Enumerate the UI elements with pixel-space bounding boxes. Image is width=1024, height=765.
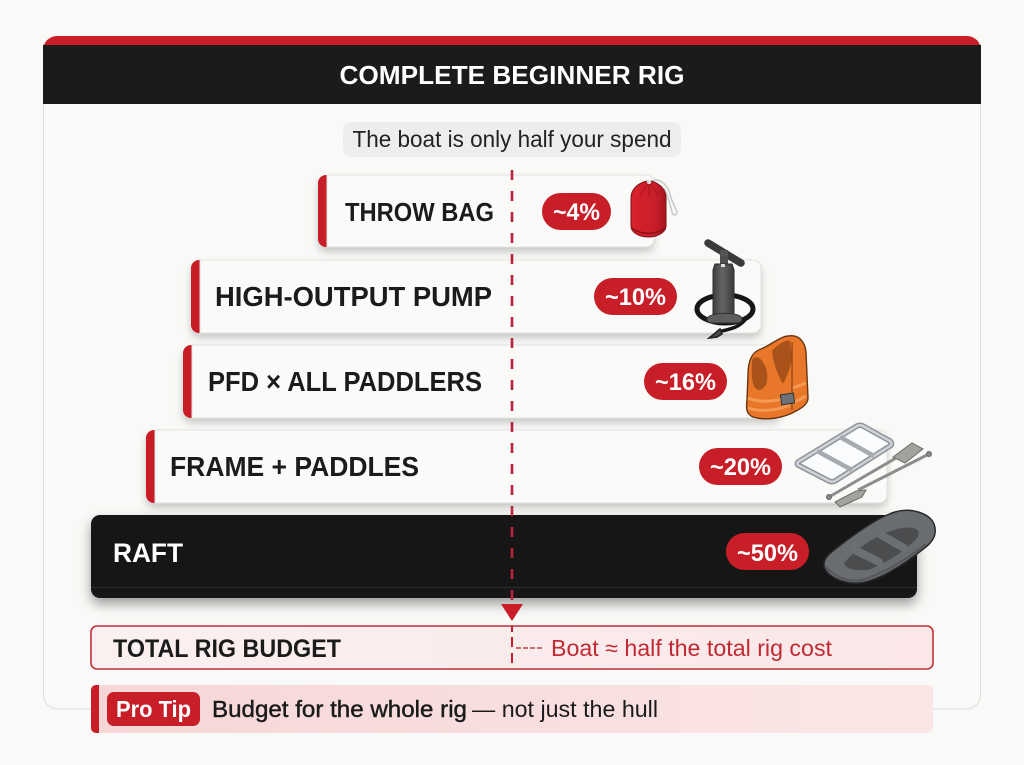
percent badge: 16%: ~16%: [655, 369, 716, 396]
bar: throw bag: [318, 175, 654, 247]
pro tip badge: Pro Tip: [116, 696, 191, 722]
bar: raft: [91, 515, 917, 598]
title banner: COMPLETE BEGINNER RIG: [340, 60, 684, 90]
bar: frame + paddles: FRAME + PADDLES: [170, 451, 419, 482]
icon: life vest: [747, 336, 808, 419]
arrow head: [501, 604, 523, 621]
bar: PFD: PFD × ALL PADDLERS: [208, 366, 482, 397]
bar: frame + paddles: [146, 430, 887, 503]
icon: paddles: [826, 443, 932, 507]
pro tip bar: Budget for the whole rig: [212, 696, 467, 722]
pro tip bar: [91, 685, 933, 733]
bar: high-output pump: HIGH-OUTPUT PUMP: [215, 281, 492, 312]
bar: high-output pump: [191, 260, 761, 333]
percent badge: 10%: [594, 278, 677, 315]
icon: raft: [824, 510, 935, 583]
subtitle pill: The boat is only half your spend: [352, 126, 672, 152]
percent badge: 4%: [542, 193, 611, 230]
percent badge: 20%: ~20%: [710, 454, 771, 481]
title banner: [43, 36, 981, 104]
total rig budget bar: Boat ≈ half the total rig cost: [551, 635, 833, 661]
percent badge: 4%: ~4%: [553, 199, 600, 226]
bar: raft: RAFT: [113, 538, 183, 568]
icon: frame: [797, 425, 892, 482]
percent badge: 50%: ~50%: [737, 540, 798, 567]
percent badge: 10%: ~10%: [605, 284, 666, 311]
total rig budget bar: TOTAL RIG BUDGET: [113, 635, 341, 663]
icon: throw bag: [631, 180, 677, 237]
pro tip bar: — not just the hull: [472, 696, 658, 722]
half-way dashed line: [511, 170, 513, 604]
bar: PFD: [183, 345, 780, 418]
percent badge: 50%: [726, 533, 809, 570]
icon: pump: [697, 243, 753, 338]
total rig budget bar: [91, 626, 933, 669]
bar: throw bag: THROW BAG: [345, 197, 494, 227]
percent badge: 16%: [644, 363, 727, 400]
pro tip badge: [107, 692, 200, 726]
percent badge: 20%: [699, 448, 782, 485]
